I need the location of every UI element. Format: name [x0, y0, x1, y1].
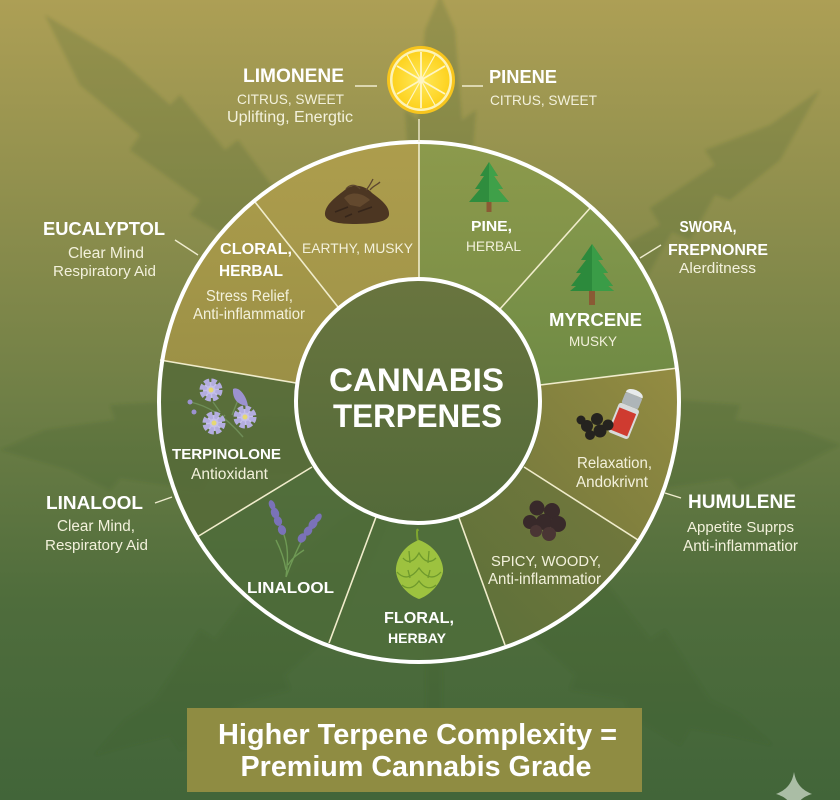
icon: purple flowers [188, 382, 253, 437]
label: limonene: Uplifting, Energtic [227, 109, 353, 126]
text: terpinolone: TERPINOLONE [172, 446, 281, 463]
segment: spicy [459, 467, 638, 645]
text: terpinolone: Antioxidant [191, 466, 269, 483]
label: limonene: LIMONENE [243, 66, 344, 87]
label: eucalyptol: Clear Mind [68, 245, 144, 262]
label: swora, frepnonre: Alerditness [679, 260, 756, 277]
text: spicy woody [488, 554, 601, 588]
segment: terpinolone [157, 360, 312, 537]
label: pinene [489, 67, 597, 108]
segment: linalool [197, 467, 376, 643]
sparkle [776, 772, 812, 800]
segment: cloral [160, 202, 338, 383]
banner: Premium Cannabis Grade [240, 751, 592, 783]
text: earthy musky: EARTHY, MUSKY [302, 240, 414, 256]
label: humulene: HUMULENE [688, 492, 796, 513]
segment: earthy [255, 142, 419, 307]
label: swora, frepnonre [668, 219, 768, 277]
text: floral herbay: FLORAL, [384, 610, 454, 627]
label: eucalyptol: EUCALYPTOL [43, 219, 165, 239]
icon: black peppercorns [523, 500, 566, 541]
text: cloral herbal [193, 241, 305, 323]
text: terpinolone [172, 446, 281, 483]
label: linalool outer: LINALOOL [46, 493, 143, 513]
banner: Higher Terpene Complexity = [218, 719, 617, 751]
text: pine herbal [466, 218, 521, 254]
icon: soil mound [325, 179, 389, 224]
text: myrcene: MYRCENE [549, 310, 642, 330]
label: humulene [683, 492, 798, 555]
text: myrcene: MUSKY [569, 333, 618, 349]
segment: relaxation [524, 368, 680, 540]
text: pine herbal: PINE, [471, 218, 512, 235]
label: pinene: PINENE [489, 67, 557, 87]
text: relaxation [576, 455, 652, 491]
text: myrcene [549, 310, 642, 349]
text: linalool: LINALOOL [247, 580, 334, 597]
icon: pine tree small [469, 162, 509, 212]
label: pinene: CITRUS, SWEET [490, 92, 597, 108]
text: floral herbay [384, 610, 454, 646]
label: limonene [227, 66, 353, 126]
icon: lavender sprigs [267, 499, 323, 577]
connector lines [155, 86, 681, 503]
label: swora, frepnonre: SWORA, [680, 219, 736, 236]
text: spicy woody: SPICY, WOODY, [491, 554, 601, 570]
center title [329, 362, 504, 434]
label: linalool outer: Clear Mind, [57, 518, 135, 535]
text: spicy woody: Anti-inflammatior [488, 571, 601, 588]
icon: pepper shaker and peppercorns [576, 386, 646, 440]
label: swora, frepnonre: FREPNONRE [668, 242, 768, 259]
banner [187, 708, 642, 792]
center circle [296, 279, 540, 523]
segment: myrcene [500, 207, 678, 385]
label: eucalyptol: Respiratory Aid [53, 263, 156, 280]
label: humulene: Anti-inflammatior [683, 538, 798, 555]
icon: pine tree large [570, 244, 614, 305]
text: cloral herbal: HERBAL [219, 263, 283, 280]
text: cloral herbal: CLORAL, [220, 241, 292, 258]
text: cloral herbal: Anti-inflammatior [193, 306, 305, 323]
label: linalool outer [45, 493, 148, 554]
outer ring [159, 142, 679, 662]
text: relaxation: Andokrivnt [576, 474, 649, 491]
center title: CANNABIS [329, 362, 504, 398]
text: cloral herbal: Stress Relief, [206, 288, 293, 305]
label: linalool outer: Respiratory Aid [45, 537, 148, 554]
label: humulene: Appetite Suprps [687, 519, 794, 536]
center title: TERPENES [333, 398, 502, 434]
text: pine herbal: HERBAL [466, 238, 521, 254]
text: floral herbay: HERBAY [388, 630, 447, 646]
text: relaxation: Relaxation, [577, 455, 652, 472]
dividers [160, 142, 678, 645]
label: limonene: CITRUS, SWEET [237, 91, 344, 107]
segment: floral [329, 517, 505, 659]
icon: lemon slice [387, 46, 455, 114]
label: eucalyptol [43, 219, 165, 280]
terpene wheel [157, 142, 680, 662]
segment: pine [419, 142, 591, 309]
icon: hop cone [396, 530, 443, 599]
